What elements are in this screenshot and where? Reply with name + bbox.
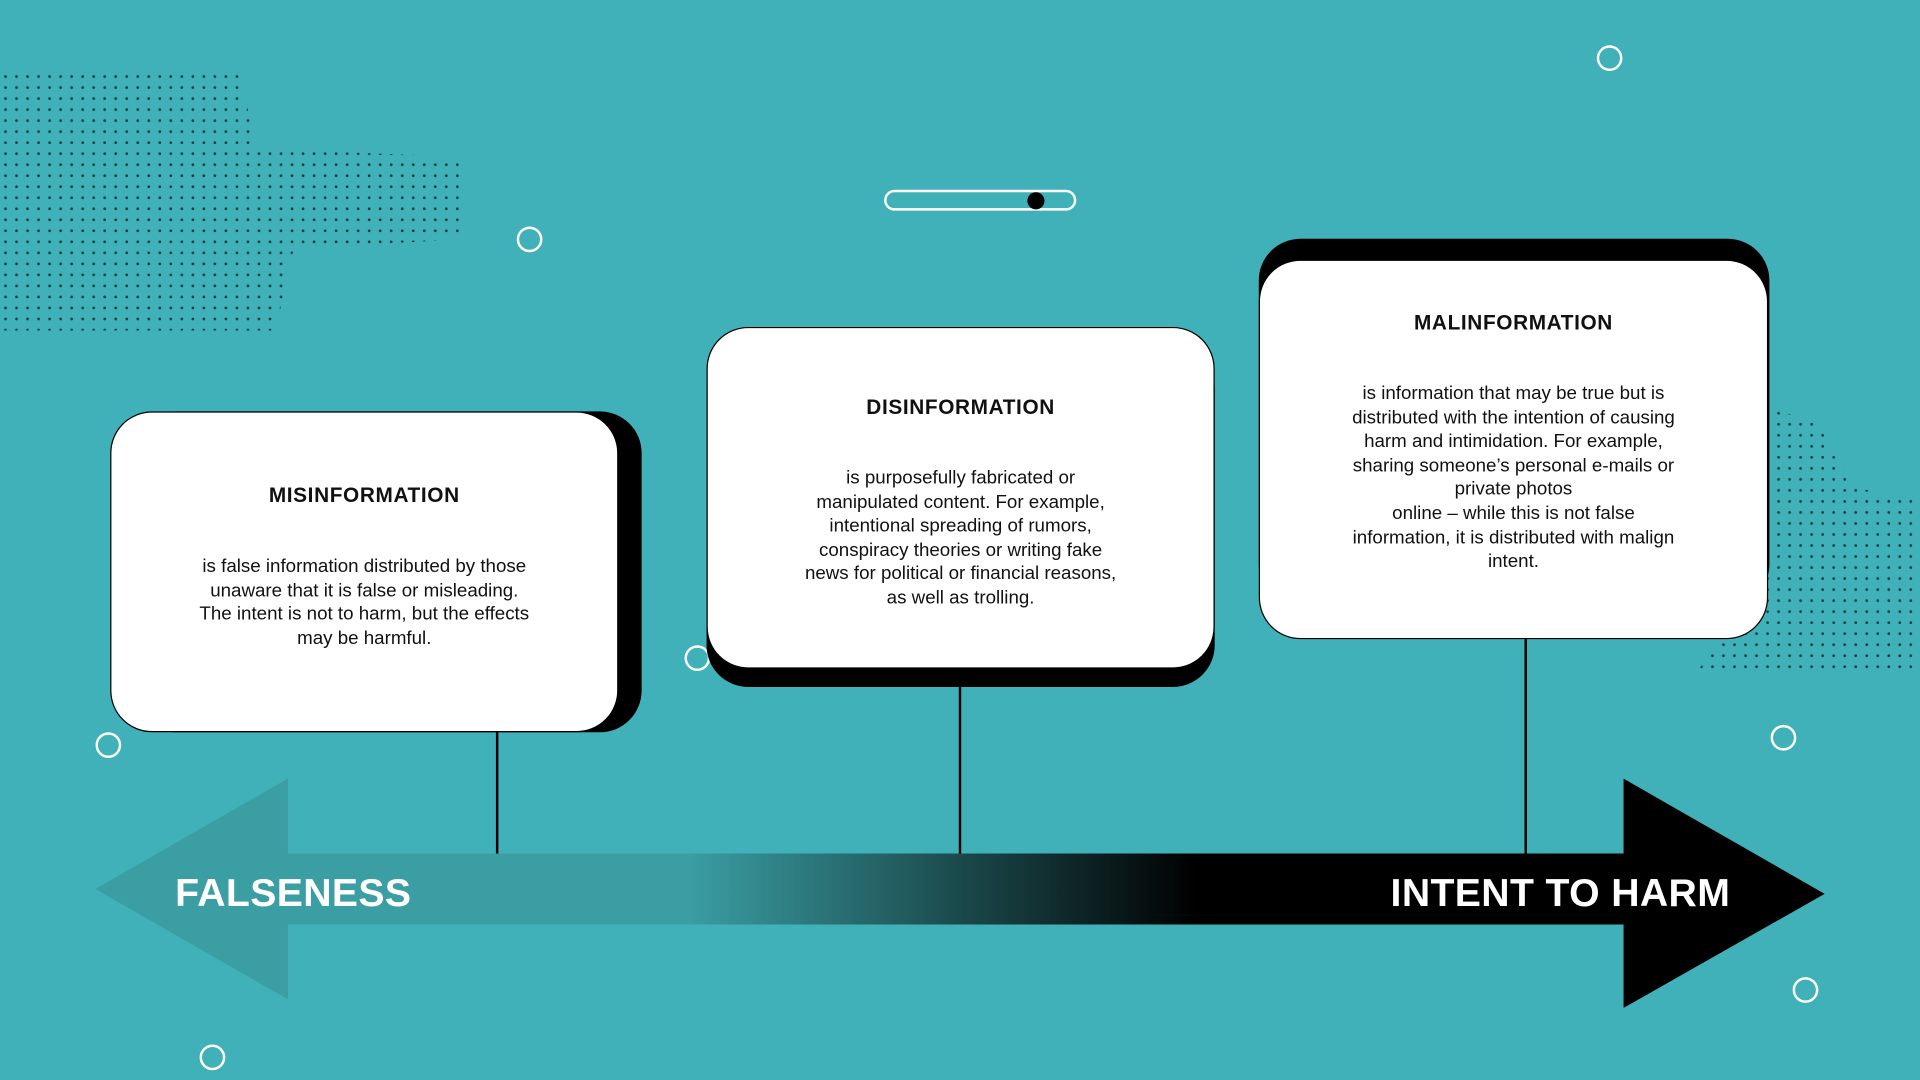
card: malinformation: harm and intimidation. For example, (1364, 431, 1663, 452)
connector lines (110, 252, 1792, 1005)
card: malinformation: online – while this is not false (1392, 503, 1635, 524)
card: misinformation: is false information distributed by those (202, 556, 526, 577)
label: intent to harm: INTENT TO HARM (1391, 871, 1730, 915)
card: malinformation: information, it is distributed with malign (1353, 527, 1674, 548)
card: disinformation (707, 327, 1215, 669)
card: misinformation: unaware that it is false or misleading. (210, 580, 518, 601)
card shadow 2 (707, 347, 1215, 687)
card: misinformation: MISINFORMATION (269, 484, 460, 507)
label: falseness: FALSENESS (175, 871, 411, 915)
card: malinformation: MALINFORMATION (1414, 311, 1613, 334)
card: malinformation: sharing someone’s personal e-mails or (1353, 455, 1674, 476)
card: malinformation: private photos (1455, 479, 1572, 500)
card shadow 1 (135, 411, 642, 732)
card: malinformation: distributed with the intention of causing (1352, 407, 1675, 428)
card: misinformation: The intent is not to harm, but the effects (199, 604, 529, 625)
card: misinformation: may be harmful. (297, 628, 431, 649)
card shadow 3 (1259, 239, 1769, 606)
dot pattern right (1696, 408, 1920, 672)
card: disinformation: as well as trolling. (887, 588, 1035, 609)
card: disinformation: conspiracy theories or writing fake (819, 540, 1102, 561)
card: disinformation: intentional spreading of rumors, (829, 516, 1092, 537)
card: disinformation: DISINFORMATION (866, 396, 1055, 419)
dot pattern top-left (0, 71, 459, 331)
card: malinformation (1259, 260, 1768, 639)
card: malinformation: intent. (1488, 551, 1539, 572)
card: disinformation: manipulated content. For example, (816, 492, 1105, 513)
slider icon (884, 190, 1076, 211)
card: malinformation: is information that may be true but is (1362, 383, 1664, 404)
card: misinformation (110, 411, 618, 732)
card: disinformation: news for political or financial reasons, (805, 564, 1116, 585)
card: disinformation: is purposefully fabricated or (846, 468, 1075, 489)
